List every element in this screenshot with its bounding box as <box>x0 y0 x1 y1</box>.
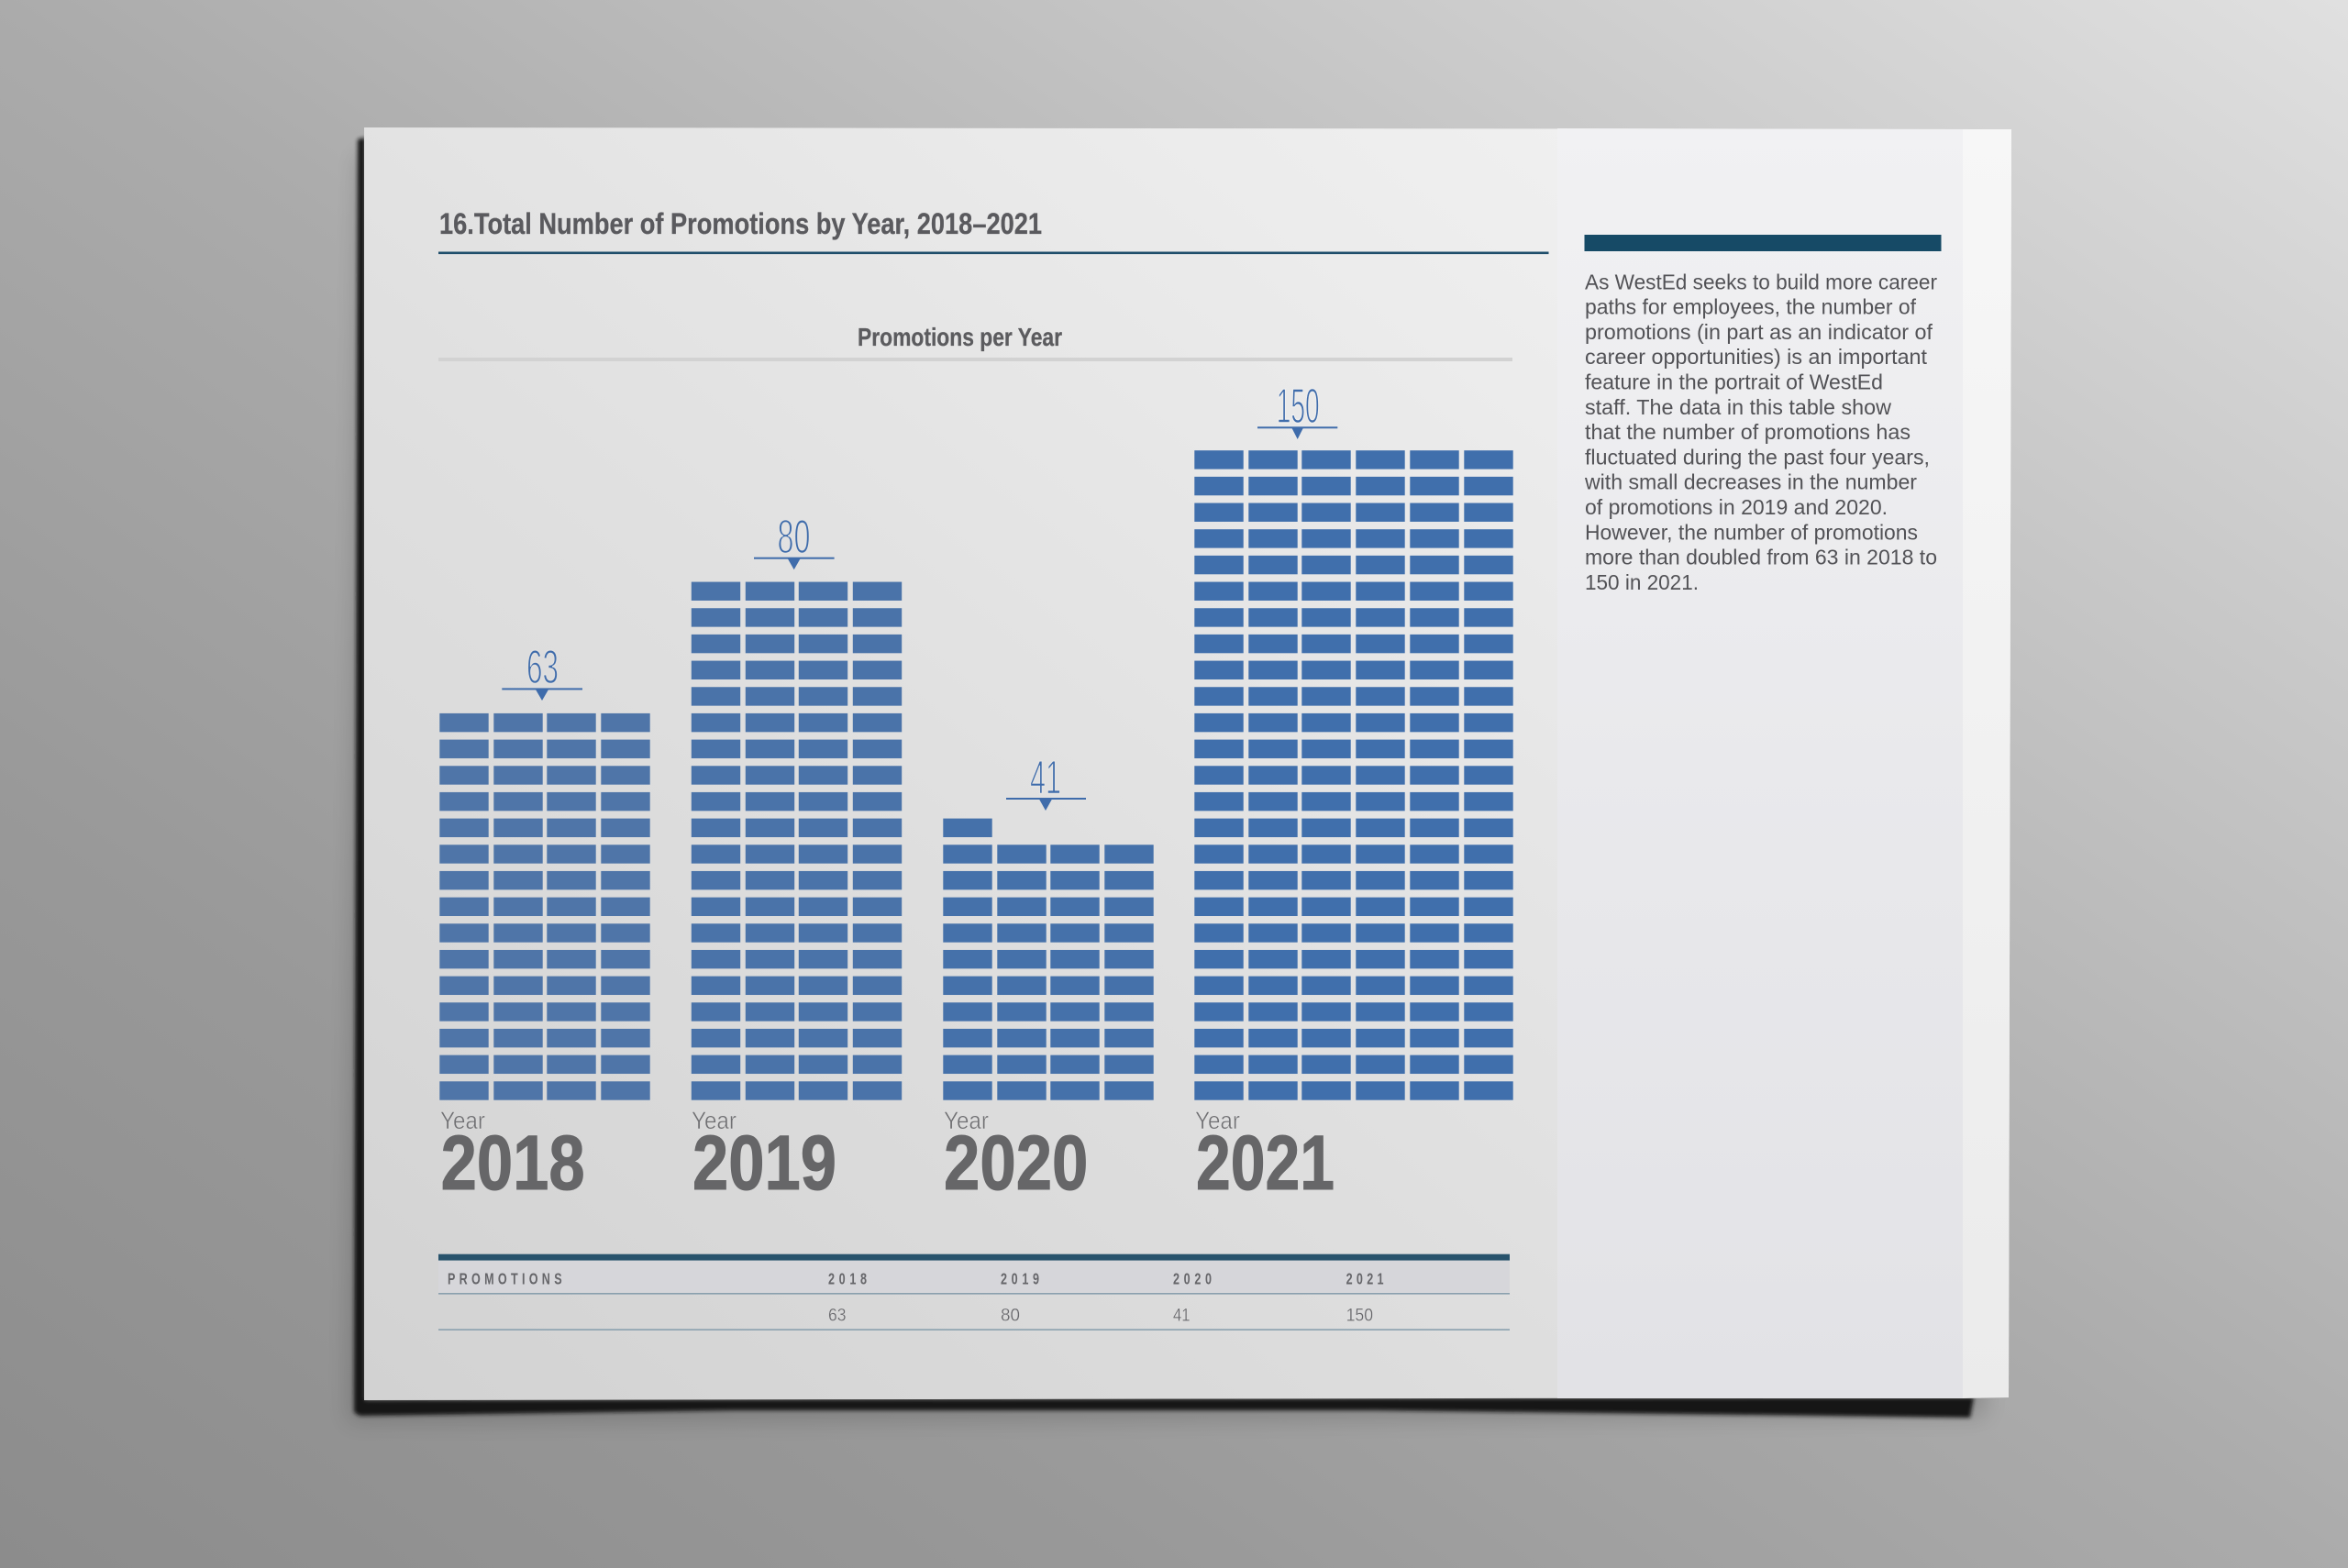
sidebar text block: However, the number of promotions <box>1585 520 1918 544</box>
year label: 2018: 2018 <box>441 1120 585 1206</box>
title rule <box>438 251 1548 254</box>
bar: 2020 bricks <box>943 819 1154 1100</box>
table header band <box>438 1261 1510 1293</box>
table header rule <box>438 1293 1510 1295</box>
table header row: 2021 <box>1346 1271 1384 1288</box>
table header row: 2018 <box>828 1271 867 1288</box>
table values row: 150 <box>1346 1306 1373 1325</box>
table header row <box>448 1271 1384 1288</box>
title: 16.Total Number of Promotions by Year, 2018–2021 <box>439 207 1042 240</box>
table header row: 2019 <box>1001 1271 1039 1288</box>
year label: 2018: Year <box>440 1107 485 1134</box>
callout: 150: 150 <box>1277 379 1320 434</box>
callout: 80 <box>754 511 835 569</box>
table values row <box>828 1306 1373 1325</box>
table values row: 41 <box>1173 1306 1191 1325</box>
bar: 2018 bricks <box>439 713 650 1100</box>
callout: 80: 80 <box>778 511 811 564</box>
chart heading rule <box>438 358 1512 361</box>
year label: 2019: 2019 <box>692 1120 836 1206</box>
bar: 2019 bricks <box>692 582 902 1100</box>
table values row: 80 <box>1001 1306 1020 1325</box>
paper shadow <box>349 138 1986 1421</box>
sidebar text block: fluctuated during the past four years, <box>1585 445 1930 469</box>
panel: sidebar background <box>1557 128 2011 1398</box>
chart heading: Promotions per Year <box>858 323 1062 351</box>
year label: 2020: Year <box>944 1107 989 1134</box>
paper sheet <box>364 127 2011 1400</box>
year label: 2020: 2020 <box>944 1120 1088 1206</box>
sidebar text block: of promotions in 2019 and 2020. <box>1585 495 1888 519</box>
callout: 63 <box>502 641 582 701</box>
year label: 2019: Year <box>692 1107 737 1134</box>
table top bar <box>438 1254 1510 1261</box>
sidebar text block: with small decreases in the number <box>1584 470 1917 494</box>
sidebar text block: more than doubled from 63 in 2018 to <box>1585 546 1937 569</box>
callout: 63: 63 <box>526 641 559 694</box>
sidebar text block: that the number of promotions has <box>1585 420 1911 444</box>
table values row: 63 <box>828 1306 846 1325</box>
sidebar text block <box>1584 270 1937 594</box>
sidebar text block: feature in the portrait of WestEd <box>1585 370 1883 394</box>
table: promotions <box>438 1254 1510 1331</box>
table header row: 2020 <box>1173 1271 1212 1288</box>
callout: 41: 41 <box>1030 752 1061 805</box>
table bottom rule <box>438 1329 1510 1331</box>
chart: promotions per year <box>439 379 1513 1206</box>
year label: 2021: 2021 <box>1196 1120 1335 1206</box>
sidebar text block: staff. The data in this table show <box>1585 395 1891 419</box>
sidebar text block: paths for employees, the number of <box>1585 295 1917 319</box>
callout: 150 <box>1257 379 1337 439</box>
sidebar accent bar <box>1585 235 1941 251</box>
sidebar text block: career opportunities) is an important <box>1585 345 1928 369</box>
sidebar text block: As WestEd seeks to build more career <box>1585 270 1937 293</box>
bar: 2021 bricks <box>1194 450 1513 1100</box>
table header row: PROMOTIONS <box>448 1271 562 1288</box>
callout: 41 <box>1006 752 1086 811</box>
year label: 2021: Year <box>1195 1107 1240 1134</box>
sidebar text block: 150 in 2021. <box>1585 570 1699 594</box>
sidebar text block: promotions (in part as an indicator of <box>1585 320 1933 344</box>
